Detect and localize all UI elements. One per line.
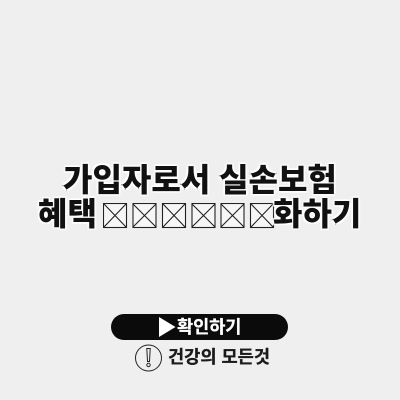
button label: 확인하기 bbox=[177, 317, 241, 337]
icon: exclamation circle bbox=[135, 344, 162, 372]
title bbox=[38, 162, 361, 232]
icon: play triangle bbox=[159, 317, 176, 337]
missing glyph boxes bbox=[103, 203, 274, 228]
brand name: 건강의 모든것 bbox=[168, 347, 270, 367]
title line 1: 가입자로서 실손보험 bbox=[63, 162, 337, 198]
button bbox=[111, 314, 288, 340]
brand bbox=[135, 344, 270, 372]
title line 2 end: 화하기 bbox=[273, 196, 361, 232]
title line 2 start: 혜택 bbox=[38, 196, 97, 232]
